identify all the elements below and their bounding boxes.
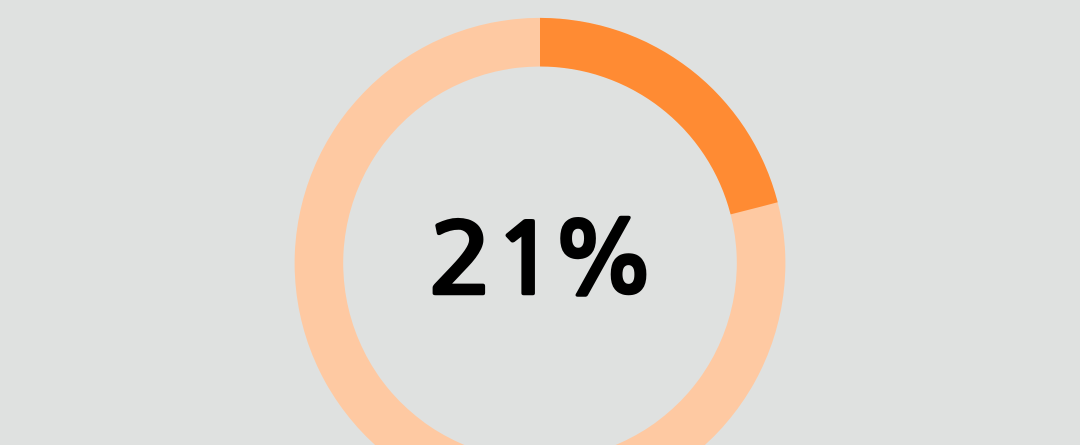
value label: 21 — [427, 212, 559, 309]
value label: % — [550, 212, 657, 309]
donut track — [295, 18, 785, 445]
value label — [427, 212, 657, 309]
chart group — [295, 18, 785, 445]
donut value arc 21% — [540, 18, 778, 214]
